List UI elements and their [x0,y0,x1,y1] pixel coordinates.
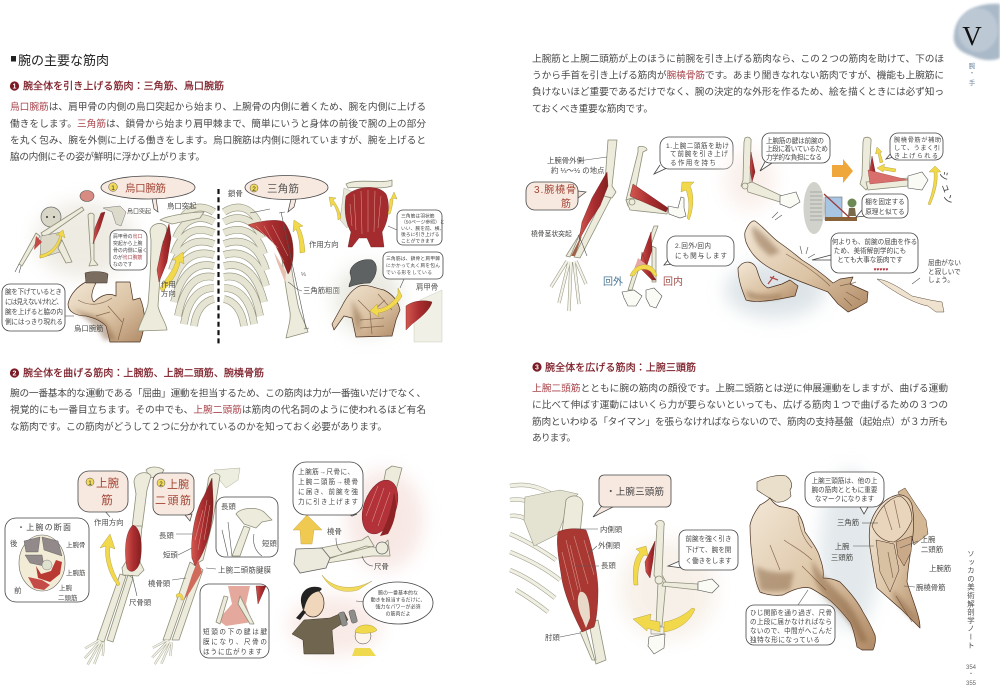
yellow arrow [160,252,184,292]
humerus top [562,496,583,534]
tendon drawing [218,586,252,626]
panel: upper arm cross-section [5,518,89,602]
bubble title: 筋 [561,197,571,210]
illustration: cartoon man with dumbbell [289,582,433,656]
body text 1: を丸く包み、腕を外側に上げる働きをします。烏口腕筋は内側に隠れていますが、腕を上げると [10,134,426,146]
title bubble: deltoid: 2 [252,186,256,193]
subheading 1: 腕全体を引き上げる筋肉：三角筋、烏口腕筋 [23,80,224,92]
subheading 3: 腕全体を広げる筋肉：上腕三頭筋 [545,361,696,374]
speech bubble: 腕の一番基本的な [378,590,418,596]
bubble note 2: 2.回外/回内 [675,241,711,250]
section heading: main arm muscles: 腕の主要な筋肉 [18,53,109,68]
bubble title: 筋 [101,493,113,507]
label: bicipital aponeurosis: 上腕二頭筋腱膜 [218,566,272,574]
bone [42,560,52,570]
fist [780,192,800,208]
yellow arrow [100,534,120,586]
label: ulna: 尺骨 [374,562,389,571]
bubble title: 上腕 [96,477,120,490]
bubble: coracoid note: 骨の内側に届く [113,247,147,254]
bubble: 上腕筋→尺骨に、 [298,467,354,476]
panel: upper arm cross-section: 上腕筋 [66,568,86,577]
plant [848,208,856,216]
red front muscles [36,560,62,582]
body text 3: 上腕二頭筋とともに腕の筋肉の顔役です。上腕二頭筋とは逆に伸展運動をしますが、曲げる運動 [532,382,948,394]
yellow curve [322,575,372,591]
labels: 三角筋 [837,518,859,527]
illustration: arm with brachioradialis: ュ [939,182,952,195]
bubble: deltoid wraps shoulder: にかかって丸く肩を包ん [386,262,440,269]
subheading 2: 2 [13,371,17,378]
label: triceps: 上腕 [835,542,850,551]
bubble title [526,182,586,210]
bubble note 2 [664,236,734,266]
label: brachioradialis: 腕橈骨筋 [916,583,946,592]
red support [824,194,850,218]
rib cage right [224,207,266,326]
illustration: shelf analogy [804,182,908,234]
label: radial head: 橈骨頭 [148,579,171,588]
bubble title: 二頭筋 [155,493,191,507]
bubble lower: の上段に届かなければなら [750,617,832,626]
body text 3: 筋肉といわゆる「タイマン」を張らなければならないので、筋肉の支持基盤（起始点）が３カ所も [532,415,948,428]
labels: 後 [10,539,18,548]
labels: 作用方向 [94,518,124,527]
bubble: く働きをします [685,556,732,565]
deltoid [872,496,912,542]
body text 3: に比べて伸ばす運動にはいくら力が要らないといっても、広げる筋肉１つで曲げるための３つの [532,398,948,411]
body text right top [532,52,944,115]
fist [294,548,330,573]
muscle: brachialis [125,525,141,571]
bubble: 上腕筋の腱は前腕の [766,136,824,145]
soft shading [35,202,135,278]
label: triceps: 三頭筋 [831,553,853,562]
thin muscle [750,152,755,182]
dashed center line [217,189,220,345]
panel: long and short head [216,497,278,557]
man head [302,589,324,617]
lower arm bones [580,620,606,664]
vertical book title: ソッカの美術解剖学ノート [966,550,976,650]
bubble: coracobrachialis note: 腕を下げているとき [5,287,62,296]
wall [804,182,824,234]
illustration: pronation and supination [603,226,734,308]
illustration: deltoid: ⅓ [301,272,306,278]
scapula [524,490,578,546]
muscle [645,541,655,578]
bubble: coracobrachialis note: 腕を上げると脇の内 [5,307,63,316]
small deltoid with ribs [406,290,442,342]
torso and arm [750,498,875,650]
label: lateral head: 外側頭 [598,541,621,550]
humerus [626,146,647,206]
panel: short head tendon [200,584,269,658]
body text right top: うから手首を引き上げる筋肉が腕橈骨筋です。あまり聞きなれない筋肉ですが、機能も上腕筋に [532,68,944,82]
ribs [510,485,560,612]
yellow arrow [681,182,694,220]
labels: 橈骨 [327,527,342,536]
bubble: 下げて、腕を開 [686,545,732,554]
chapter mark: V: V [962,21,982,51]
head [757,475,792,502]
forearm bones [97,574,133,642]
bubble: 腕橈骨筋が補助 [894,136,941,144]
panel: upper arm cross-section: 前 [14,586,21,595]
back view deltoid [340,180,392,247]
muscles [869,156,876,176]
muscle: coracobrachialis large [157,224,171,282]
hand [79,636,109,669]
panel: long and short head: 短頭 [262,539,277,548]
illustration: arm with brachioradialis: ン [941,193,954,206]
soft shading [820,470,880,630]
subheading 1: 1 [13,84,17,91]
muscle upper arm [355,475,405,539]
bubble title: 3.腕橈骨 [534,184,576,196]
labels: 作用方向 [309,240,339,249]
fists [698,579,719,593]
label: deltoid tuberosity: 三角筋粗面 [303,286,340,295]
muscle [640,232,656,280]
yellow arrow around chest [370,288,402,317]
illustration: coracobrachialis [2,176,195,342]
shoulder [214,468,240,488]
label: scapula: 肩甲骨 [416,282,438,292]
bubble [886,133,943,160]
bubble title: 2 [159,482,163,488]
panel: upper arm cross-section: 上腕 [59,583,72,592]
bubble: deltoid note: ことができます [401,237,435,244]
bubble: note 1: て前腕を引き上げ [670,149,728,158]
forearm horizontal [662,582,698,590]
bubble: deltoid note: いい、腕を前、横、 [401,225,444,232]
label: styloid process: 橈骨茎状突起 [531,229,572,238]
chapter mark: V [954,4,1000,87]
subheading 2: 腕全体を曲げる筋肉：上腕筋、上腕二頭筋、腕橈骨筋 [23,366,264,380]
bubble title: coracobrachialis: 烏口腕筋 [125,182,166,194]
illustration: skeleton with center line [138,189,266,345]
bubble title [78,471,128,517]
panel: short head tendon: 膜になり、尺骨の [203,637,267,646]
bubble title: ・上腕三頭筋 [606,486,664,498]
muscle: biceps [192,478,213,566]
chapter mark: V: 手 [969,78,976,87]
label: long head: 長頭 [601,561,616,570]
bubble: 力に引き上げます [298,497,358,506]
bubble lower: ひじ関節を通り過ぎ、尺骨 [750,608,832,617]
title bubble: deltoid: 三角筋 [267,182,299,195]
label: brachialis: 上腕筋 [929,564,951,573]
bubble title [593,475,671,517]
caption: と寂しいで [928,267,961,276]
illustration: side arm muscles [831,488,951,628]
page numbers: 354 [966,665,977,671]
bubble: coracobrachialis note: には見えないけれど、 [5,298,63,306]
small yellow arrow [176,593,183,600]
body text 2: 視覚的にも一番目立ちます。その中でも、上腕二頭筋は筋肉の代名詞のように使われるほど有名 [10,403,426,416]
bubble title: coracobrachialis [101,176,195,212]
label: biceps: 二頭筋 [921,545,943,554]
tendon text: 短頭の下の腱は腱 [203,627,267,636]
page numbers: 355 [966,681,977,687]
measure lines [250,209,309,329]
speech bubble [356,582,433,624]
tendon [578,592,590,628]
dumbbell [338,609,358,627]
bubble: deltoid wraps shoulder: 三角筋は、鎖骨と肩甲棘 [386,255,440,262]
chest behind arm [898,488,928,545]
bubble [760,133,830,171]
label: coracobrachialis: 烏口腕筋 [74,324,104,333]
humerus vertical [654,520,666,626]
bubble: note 1: 1.上腕二頭筋を助け [666,141,729,150]
big bubble [812,233,918,273]
illustration: big biceps muscle and forearm [293,462,423,591]
illustration: T-shaped arm bone [620,520,738,654]
illustration: brachialis arm [78,467,164,669]
fist [908,172,928,190]
label: clavicle: 鎖骨 [228,189,243,198]
muscle: brachioradialis [579,172,608,240]
label: action direction [161,280,176,298]
speech bubble: 動きを担当するだけに、 [371,596,425,604]
body text right top: 負けないほど重要であるだけでなく、腕の決定的な外形を作るため、絵を描くときには必ず知っ [532,85,944,98]
yellow arrows [329,197,341,220]
illustration: deltoid [245,176,445,342]
body text 3: あります。 [532,432,576,444]
arm shape [745,221,868,312]
small humerus and muscle [88,206,126,266]
bubble: deltoid note: 後ろに引き上げる [401,231,440,238]
big bubble: とても大事な筋肉です [837,255,903,264]
bubble: deltoid note [388,210,445,245]
illustration: biceps arm [146,468,272,669]
bones [741,137,755,190]
humerus [280,240,308,338]
yellow arc [630,265,657,276]
bubble: 前腕を強く引き [685,534,732,543]
subheading 3: 3 [535,365,539,372]
big bubble: ♥♥♥♥♥ [874,267,888,273]
body text 1: 働きをします。三角筋は、鎖骨から始まり肩甲棘まで、簡単にいうと身体の前後で腕の上の部分 [10,117,426,130]
panel labels: 長頭 [221,502,236,511]
chapter mark: V: ・ [969,70,975,77]
forearm bones [628,226,658,290]
body text right top: 上腕筋と上腕二頭筋が上のほうに前腕を引き上げる筋肉なら、この２つの筋肉を助けて、下のほ [532,52,944,65]
bubble title: 上腕 [167,478,189,491]
labels: 烏口突起 [167,202,197,210]
forearm bones [300,536,390,566]
page numbers: ・ [968,672,974,678]
label: supination: 回外 [603,276,623,288]
arrow: orange [832,159,853,183]
bubble [856,194,908,218]
caption [912,258,961,284]
body text 2 [10,386,426,433]
figure with cap [332,260,402,337]
bubble [668,530,738,570]
hand [146,635,177,669]
bubble: deltoid wraps shoulder: でいる形をしている [386,269,432,276]
small flexed arm [738,262,798,301]
triceps muscle [557,529,598,632]
big yellow arrow [928,166,941,205]
man body [292,612,348,654]
labels: 長頭 [159,531,174,540]
muscular arm [68,272,144,342]
label: coracoid process small: 烏口突起 [127,208,151,216]
label: triceps [831,542,874,562]
illustration: large forearm [725,221,961,318]
label: pronation: 回内 [663,275,683,288]
gray back muscles [24,537,62,566]
bubble: 上腕三頭筋は、他の上 [812,476,878,485]
bubble: coracoid note: 突起から上腕 [113,240,142,247]
bubble: き上げられる [894,152,938,160]
forearm bones [163,562,203,640]
big bubble: ため、美術解剖学的にも [834,246,906,255]
illustration: arm without brachioradialis [725,133,830,220]
bubble: deltoid wraps shoulder [383,252,443,288]
left humerus [138,224,167,331]
illustration: arm with brachioradialis [860,133,954,206]
bubble [293,462,363,516]
window [825,197,842,220]
yellow up arrow [293,515,322,544]
body text 2: 腕の一番基本的な運動である「屈曲」運動を担当するため、この筋肉は力が一番強いだけでなく、 [10,386,426,400]
bubble: deltoid note: 三角筋は羽状筋 [401,212,435,220]
soft shading [725,262,825,318]
shelf [825,217,857,221]
bubble title [153,473,194,521]
kid with yellow hat [352,625,377,656]
biceps side [896,536,912,566]
label: action direction: 方向 [161,289,176,298]
bubble: coracoid note: なのです [113,261,133,268]
bubble: 上腕二頭筋→橈骨 [298,477,358,486]
bubble: 腕の筋肉とともに重要 [812,485,878,494]
body text 2: な筋肉です。この筋肉がどうして２つに分かれているのかを知っておく必要があります。 [10,420,387,433]
bubble: 力学的な負担になる [766,152,822,162]
hand [551,261,586,311]
bubble: coracobrachialis note [2,284,65,331]
shoulder [146,467,164,478]
cross-section oval [19,535,65,591]
humerus [604,140,617,198]
small yellow arrows [876,147,883,163]
label: olecranon: 肘頭 [545,633,560,642]
hand [668,197,686,218]
bubble: coracoid note [110,230,147,270]
label: biceps [900,535,943,554]
bubble: して、うまく引 [894,144,940,152]
bubble: 棚を固定する [865,197,905,206]
cross-section title: ・上腕の断面 [17,522,71,532]
bubble: coracoid note: のが烏口腕筋 [113,254,142,261]
upper bones [382,466,402,490]
body text 3 [532,382,948,444]
yellow arrow [293,220,305,253]
bubble title: coracobrachialis: 1 [111,185,115,192]
caption: しょう。 [928,276,954,284]
bubble title: 1 [88,481,92,487]
hands [622,290,642,306]
caption: 屈曲がない [928,258,961,267]
illustration: back figure arm [746,470,884,650]
triceps side [876,540,899,592]
label: one third to half point: 約 ⅓〜½ の地点 [551,166,605,175]
body text right top: ておくべき重要な筋肉です。 [532,102,653,115]
chapter mark: V: 腕 [969,61,976,70]
small straight arm [877,279,944,312]
bubble: coracobrachialis note: 側にはっきり現れる [5,318,63,326]
title bubble: deltoid [245,176,328,212]
forearm [626,198,668,214]
onomatopoeia: シ [937,170,950,183]
bubble: note 1 [654,137,733,174]
illustration: biceps arm: 短頭 [163,550,178,560]
page numbers [966,665,977,687]
label: biceps: 上腕 [921,535,936,544]
body text 1 [10,100,426,163]
speech bubble: の筋肉だよ [385,610,411,618]
soft shading [347,470,423,570]
bubble lower: ないので、中間がへこんだ [750,626,832,635]
yellow arrows [633,546,648,585]
bubble: note 1: る作用を持ち [670,158,716,167]
bones [860,137,872,190]
label: action direction: 作用 [161,280,176,289]
panel: upper arm cross-section: 二頭筋 [58,593,78,602]
panel: upper arm cross-section: 上腕骨 [66,540,86,549]
body text 1: 脇の内側にその姿が鮮明に浮かび上がります。 [10,150,205,163]
bubble note 2: にも関与します [675,251,727,260]
bubble: 上段に着いているため [766,144,828,153]
deltoid muscle [248,220,293,274]
illustration: triceps anatomy [510,475,671,664]
bubble: 原理と似てる [865,208,905,216]
impact marks [800,246,815,258]
body text 1: 烏口腕筋は、肩甲骨の内側の烏口突起から始まり、上腕骨の内側に着くため、腕を内側に上げる [10,100,426,113]
side arm shape [869,495,920,628]
stick figure with paddle [15,190,94,273]
panel: short head tendon: ほうに広がります [203,647,262,656]
bubble: deltoid note: （50ページ参照）と [401,219,445,226]
bubble: に届き、前腕を強 [298,487,358,496]
speech bubble: 強力なパワーが必須 [375,604,421,610]
forearm [566,196,611,258]
illustration: thumbs-up bent arm [626,146,694,220]
red muscle wedge [630,184,668,212]
bubble: coracoid note: 肩甲骨の烏口 [113,233,142,240]
label: ulnar head: 尺骨頭 [129,598,152,607]
big bubble: 何よりも、前腕の屈曲を作る [832,237,917,246]
bones in panel [232,508,272,556]
labels: 上腕骨外側 [547,156,584,165]
bubble [805,472,884,514]
bubble lower [746,590,835,645]
bubble lower: 独特な形になっている [750,635,820,644]
bubble: なマークになります [815,495,875,503]
rib cage left [172,207,214,326]
labels: 内側頭 [600,525,623,534]
illustration: brachioradialis anatomy arm [526,140,617,311]
humerus lower [122,526,144,576]
